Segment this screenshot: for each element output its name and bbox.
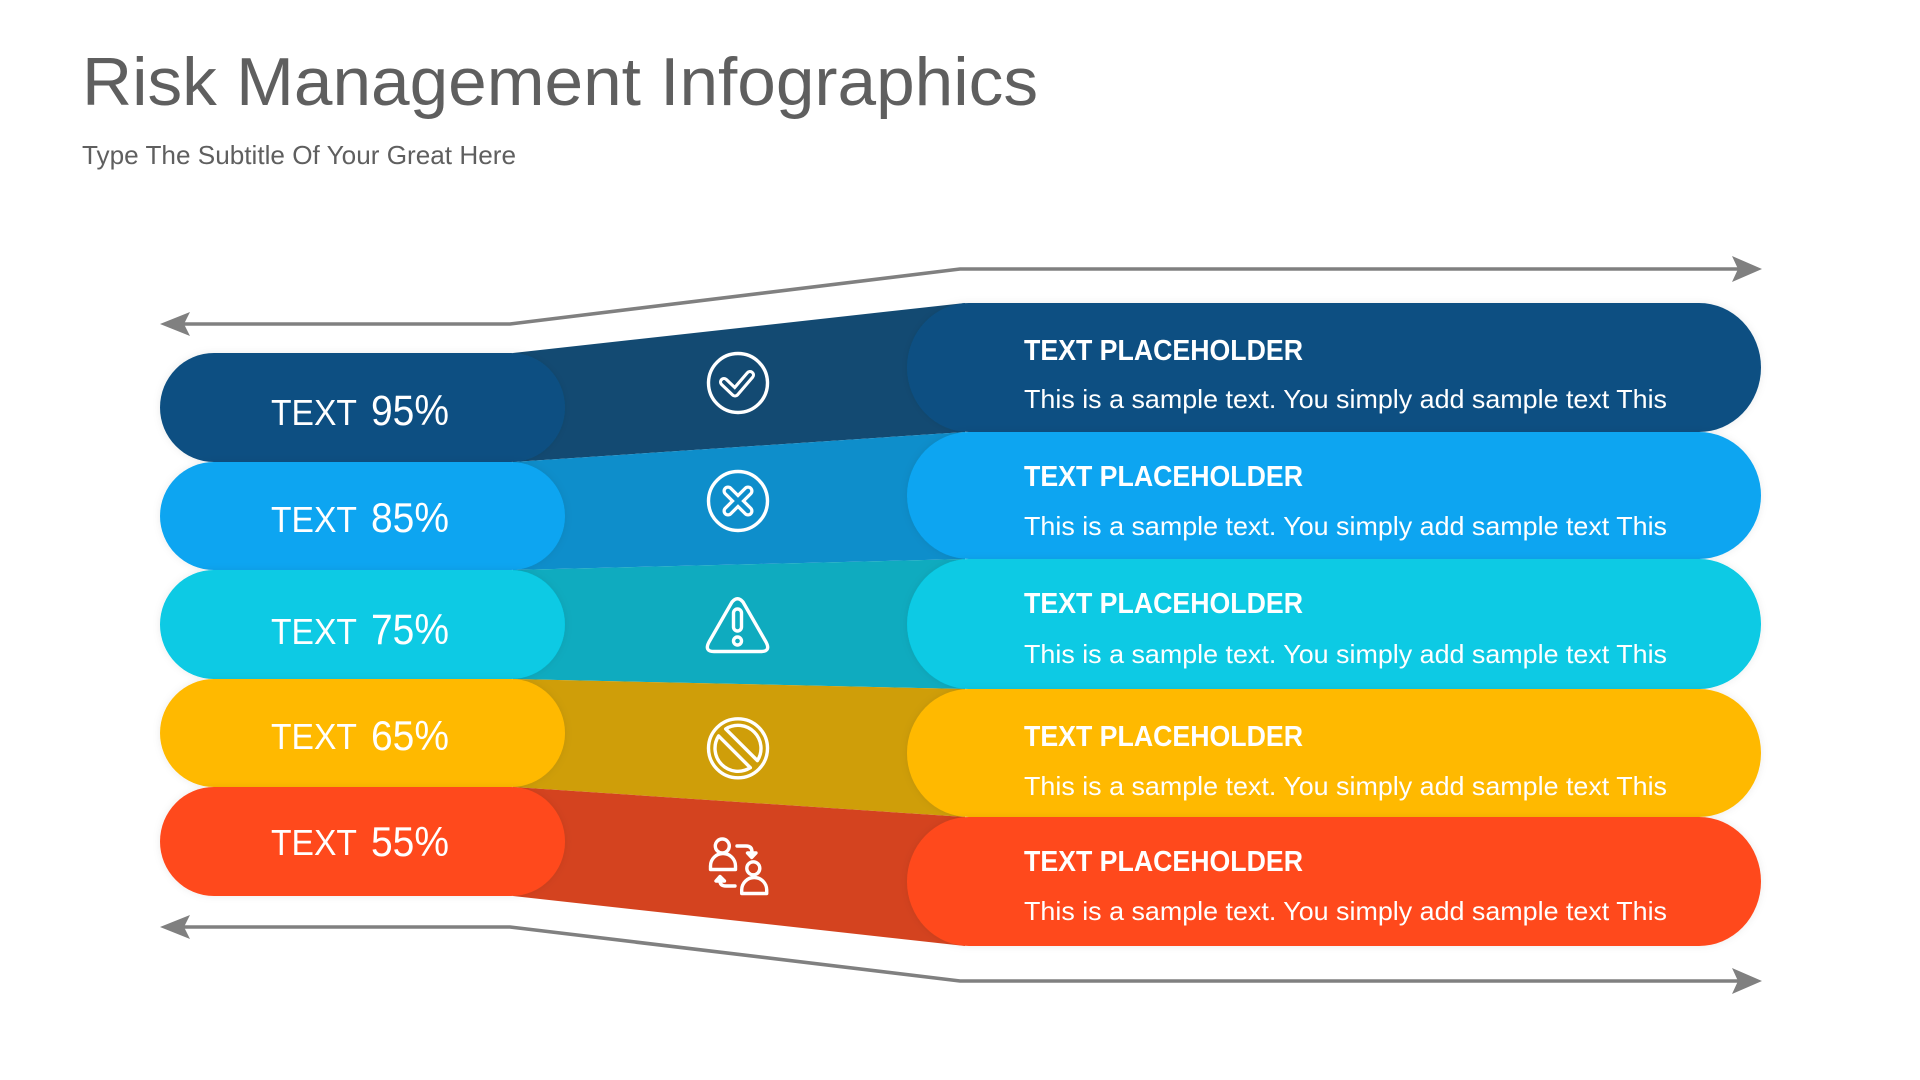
- label: text 65%: [271, 712, 449, 759]
- text block: row 5: This is a sample text. You simply add sample text This: [1024, 896, 1667, 926]
- text block: row 2: TEXT PLACEHOLDER: [1024, 461, 1303, 493]
- text block: row 4: This is a sample text. You simply add sample text This: [1024, 771, 1667, 801]
- right pill: row 2: [907, 432, 1761, 559]
- label: text 75%: TEXT: [271, 611, 357, 652]
- icon: check in circle: [708, 354, 768, 412]
- text block: row 3: TEXT PLACEHOLDER: [1024, 588, 1303, 620]
- right pill: row 5: [907, 817, 1761, 946]
- text block: row 1: This is a sample text. You simply add sample text This: [1024, 384, 1667, 414]
- band: row 2: [513, 432, 965, 570]
- band: row 3: [513, 559, 965, 689]
- subtitle: Type The Subtitle Of Your Great Here: [82, 140, 516, 170]
- label: text 95%: [271, 387, 449, 435]
- icon: prohibited sign: [708, 719, 768, 778]
- text block: row 3: [1024, 588, 1667, 669]
- label: text 85%: [271, 494, 449, 541]
- band: row 1: [513, 303, 965, 462]
- label: text 75%: 75%: [371, 606, 449, 654]
- text block: row 5: [1024, 846, 1667, 926]
- text block: row 4: [1024, 721, 1667, 801]
- label: text 55%: [271, 818, 449, 865]
- label: text 55%: TEXT: [271, 822, 357, 863]
- right pill: row 3: [907, 559, 1761, 689]
- label: text 85%: 85%: [371, 494, 449, 541]
- icon: people exchange: [710, 839, 767, 894]
- left pill: row 5: [160, 787, 565, 896]
- text block: row 4: TEXT PLACEHOLDER: [1024, 721, 1303, 753]
- text block: row 2: This is a sample text. You simply add sample text This: [1024, 511, 1667, 541]
- text block: row 3: This is a sample text. You simply add sample text This: [1024, 639, 1667, 669]
- arrow: top flow: [160, 256, 1762, 336]
- band: row 4: [513, 679, 965, 817]
- label: text 85%: TEXT: [271, 499, 357, 540]
- title: Risk Management Infographics: [82, 44, 1038, 120]
- label: text 95%: TEXT: [271, 392, 357, 433]
- icon: warning triangle: [707, 599, 768, 652]
- icon: cross in circle: [708, 472, 768, 530]
- text block: row 2: [1024, 461, 1667, 541]
- label: text 65%: 65%: [371, 712, 449, 759]
- right pill: row 4: [907, 689, 1761, 817]
- label: text 65%: TEXT: [271, 716, 357, 757]
- label: text 75%: [271, 606, 449, 654]
- left pill: row 4: [160, 679, 565, 787]
- text block: row 1: TEXT PLACEHOLDER: [1024, 335, 1303, 367]
- right pill: row 1: [907, 303, 1761, 432]
- label: text 95%: 95%: [371, 387, 449, 435]
- left pill: row 3: [160, 570, 565, 679]
- left pill: row 1: [160, 353, 565, 462]
- label: text 55%: 55%: [371, 818, 449, 865]
- left pill: row 2: [160, 462, 565, 570]
- text block: row 1: [1024, 335, 1667, 414]
- text block: row 5: TEXT PLACEHOLDER: [1024, 846, 1303, 878]
- band: row 5: [513, 787, 965, 946]
- arrow: bottom flow: [160, 915, 1762, 994]
